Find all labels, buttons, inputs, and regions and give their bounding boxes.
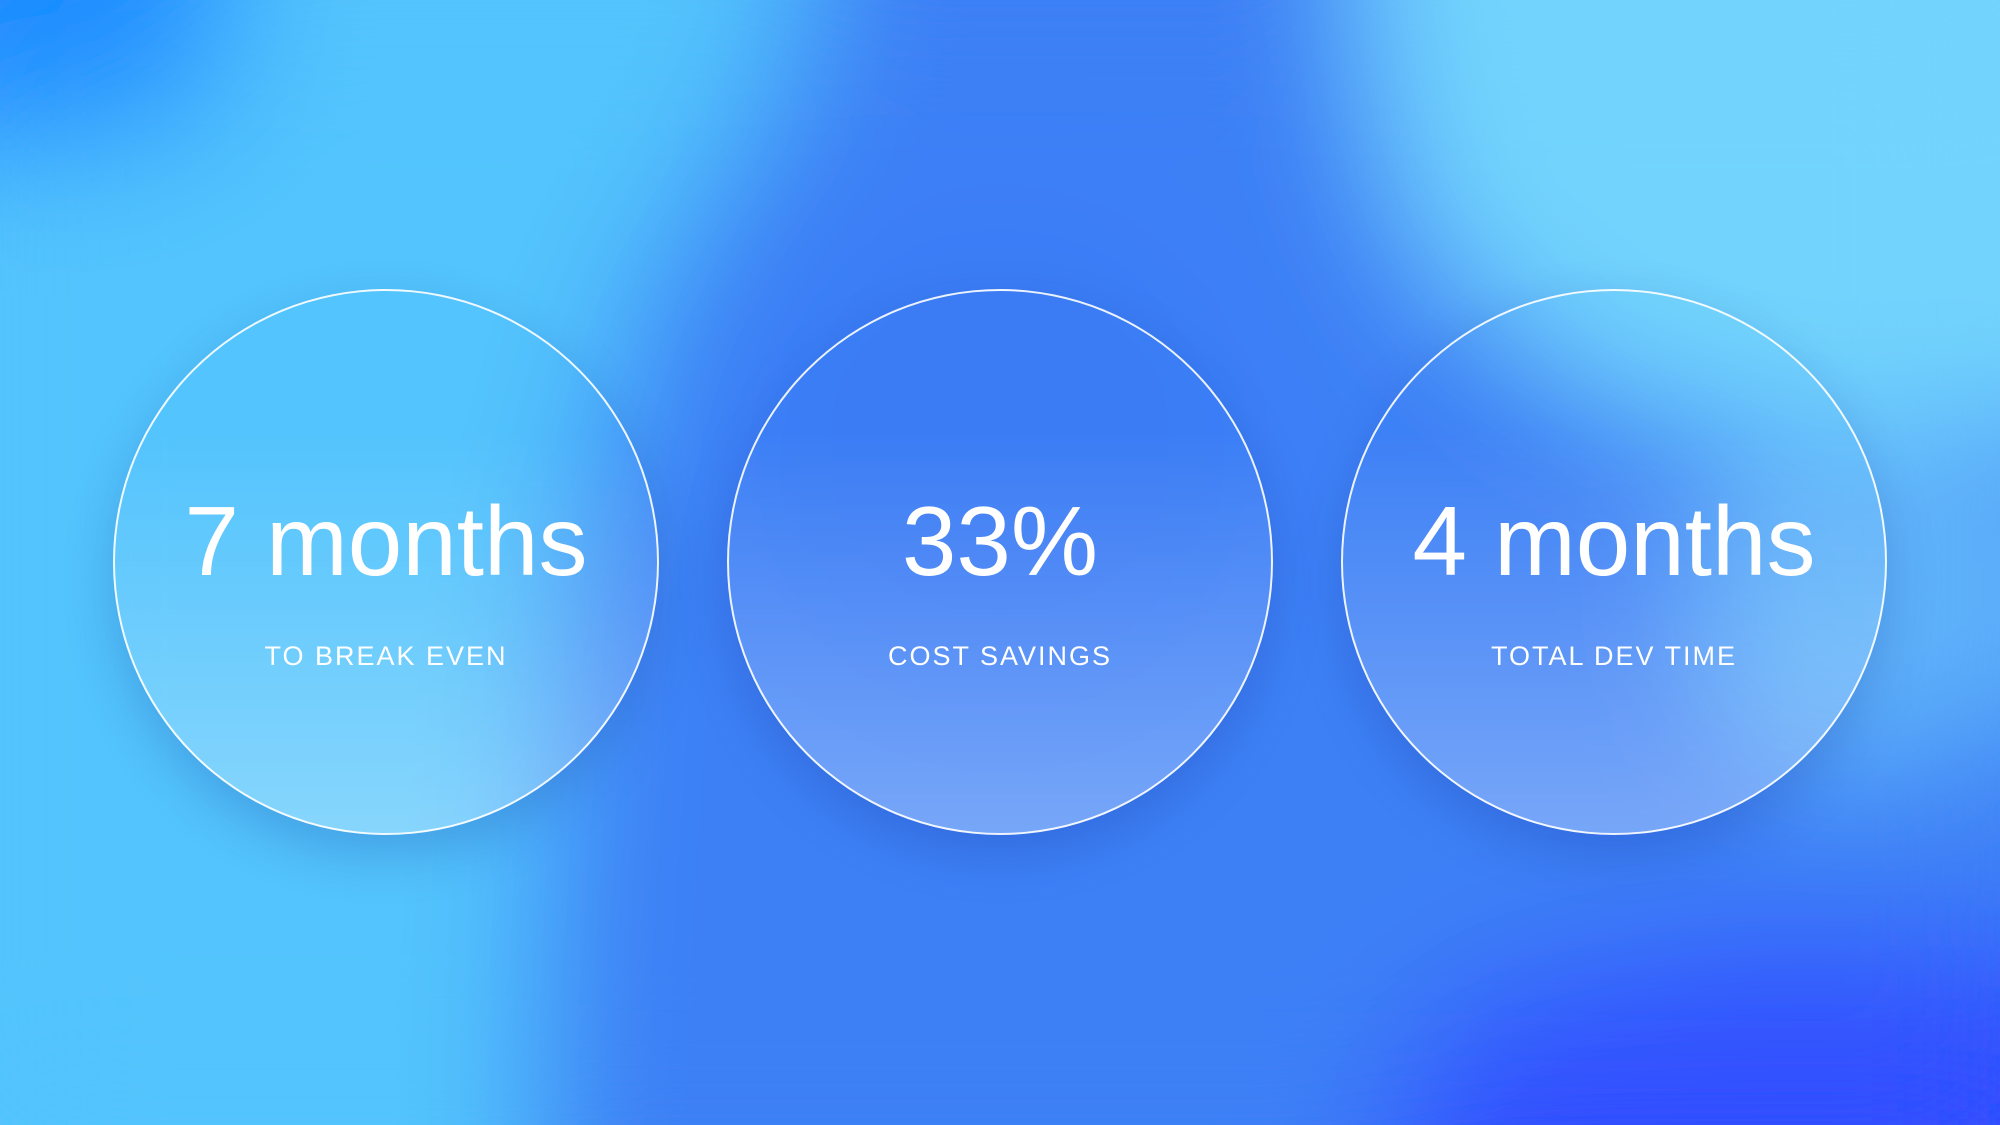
label: to break even: TO BREAK EVEN — [264, 641, 508, 671]
stat: 7 months: 7 months — [184, 486, 588, 596]
stat: 4 months: 4 months — [1412, 486, 1816, 596]
circle: break even — [113, 289, 659, 835]
label: cost savings: COST SAVINGS — [888, 641, 1112, 671]
circle: dev time — [1341, 289, 1887, 835]
label: total dev time: TOTAL DEV TIME — [1491, 641, 1737, 671]
stat: 33%: 33% — [902, 486, 1098, 596]
circle: cost savings — [727, 289, 1273, 835]
